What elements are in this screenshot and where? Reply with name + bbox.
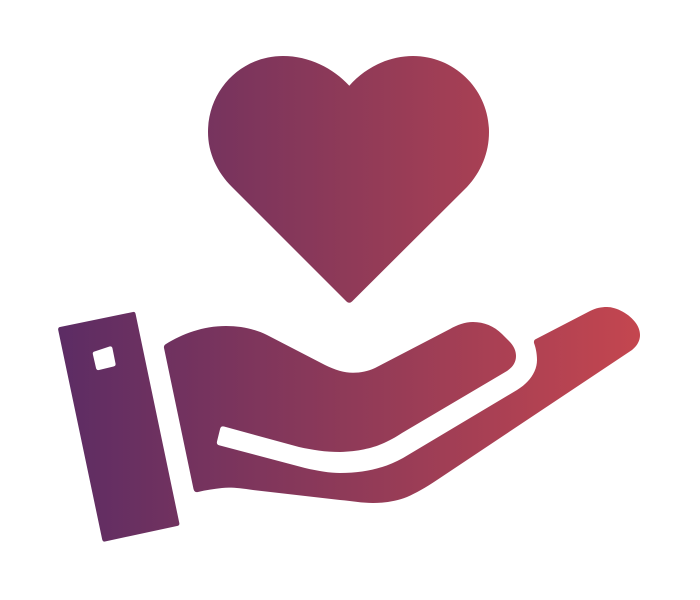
icon: sleeve cuff with button: [58, 312, 179, 542]
icon: open hand: [164, 307, 640, 503]
icon: heart: [208, 56, 489, 303]
